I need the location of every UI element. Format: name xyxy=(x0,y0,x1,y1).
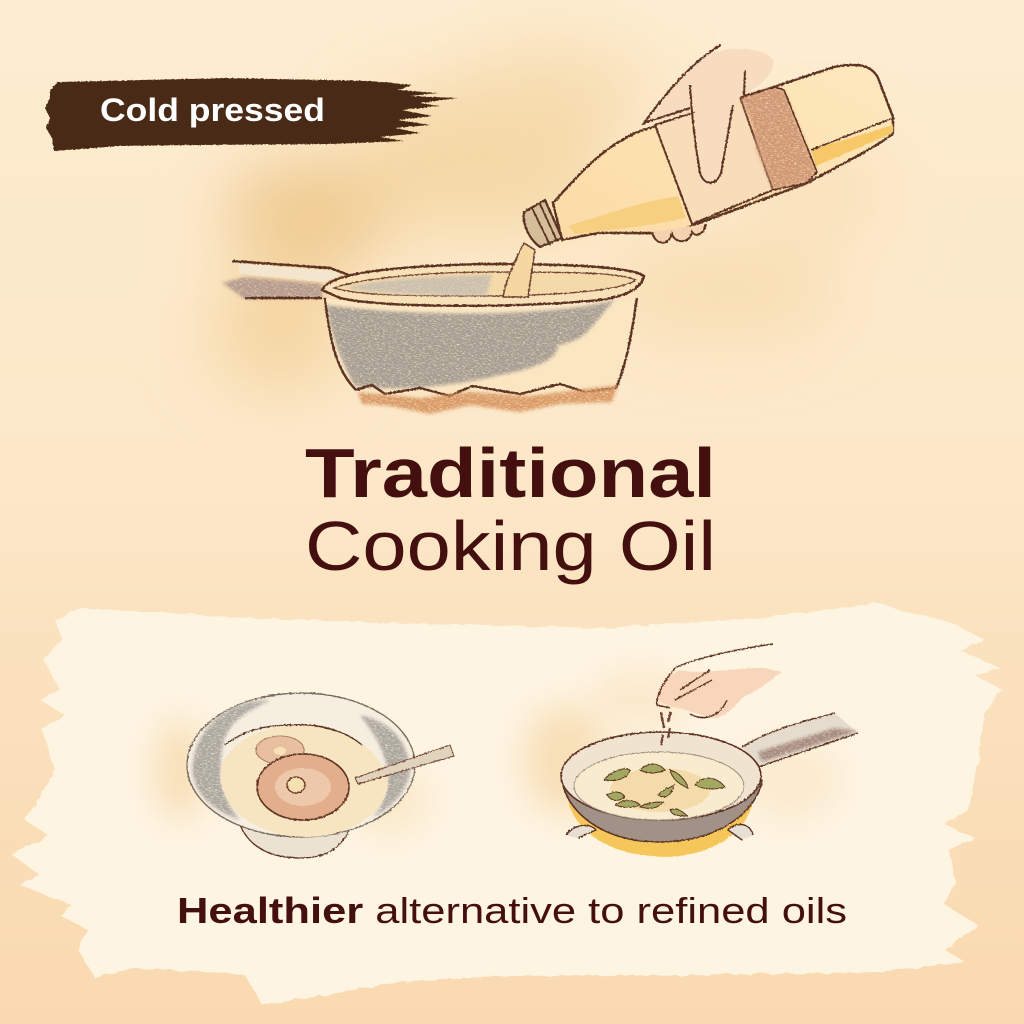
pan base scorch xyxy=(358,385,618,414)
pan rim xyxy=(322,264,644,306)
large vada xyxy=(257,754,349,820)
bottle xyxy=(553,65,893,240)
pan body xyxy=(325,298,637,398)
burner flame xyxy=(568,802,753,857)
hand holding the bottle xyxy=(644,45,774,243)
illustration: oil bottle pouring into a pan xyxy=(222,45,893,414)
illustration: vada frying in a bowl xyxy=(187,693,454,858)
pan body xyxy=(562,780,762,842)
bottle neck rings xyxy=(524,200,562,247)
panel: cream brush stroke xyxy=(12,603,1002,1005)
spoon xyxy=(355,745,454,784)
title: Cooking Oil xyxy=(305,507,716,585)
caption: Healthier alternative to refined oils xyxy=(177,890,847,931)
leaves xyxy=(604,764,725,816)
title: Traditional xyxy=(305,434,716,512)
illustration: tempering in a frying pan over a burner xyxy=(561,644,858,857)
hand sprinkling seeds xyxy=(657,644,782,745)
label banner: cold pressed xyxy=(45,78,458,151)
small vada xyxy=(256,736,304,764)
watercolor stains behind the lower illustrations xyxy=(154,670,840,835)
pan handle xyxy=(222,261,349,299)
watercolor stains behind the top illustration xyxy=(210,50,890,390)
label banner: cold pressed: Cold pressed xyxy=(100,92,325,128)
title xyxy=(305,434,716,585)
oil stream xyxy=(503,243,535,297)
pan handle xyxy=(742,713,858,767)
burner stand xyxy=(566,825,753,840)
